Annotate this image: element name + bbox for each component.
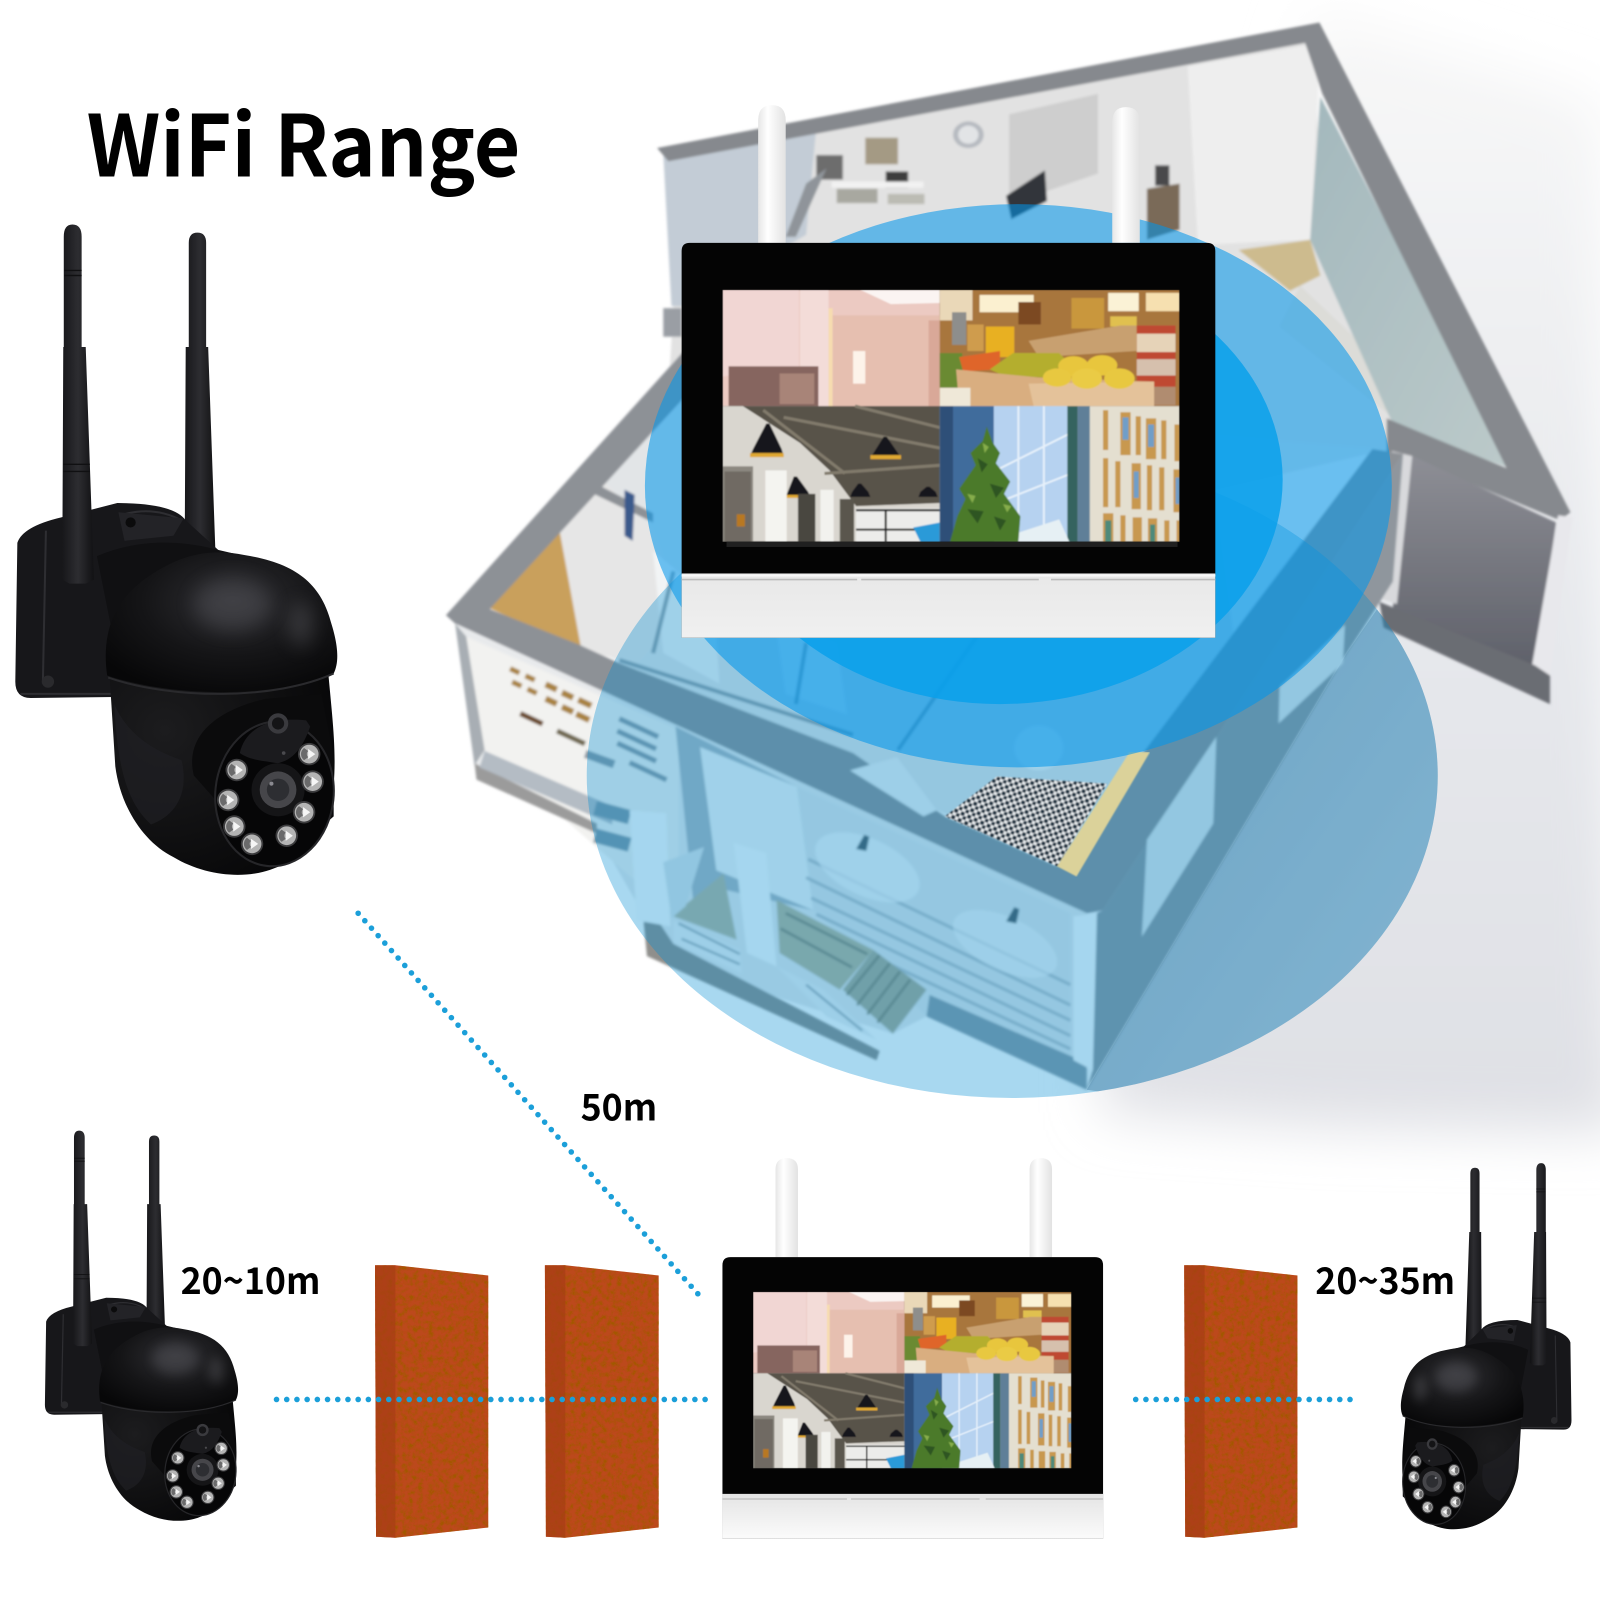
right dotted line	[1136, 1397, 1352, 1402]
diagonal dotted line	[358, 913, 698, 1294]
right side wall	[1310, 97, 1514, 469]
shelf decorations	[816, 138, 924, 204]
right small camera	[1399, 1163, 1571, 1529]
camera feeds	[753, 1292, 1071, 1468]
wall behind door	[676, 727, 813, 910]
porch floor	[673, 873, 737, 940]
wifi coverage circle: inner	[717, 255, 1283, 704]
interior wall panels	[653, 454, 1367, 770]
brick wall 3	[1184, 1265, 1297, 1538]
antennas	[776, 1158, 1052, 1257]
front interior floor	[580, 393, 1372, 866]
front facade	[455, 623, 1087, 1090]
top rim	[657, 22, 1570, 515]
camera feeds	[722, 290, 1180, 542]
wood strip	[1057, 752, 1150, 877]
porch foundation	[643, 913, 880, 1060]
monitor bezel	[722, 1257, 1103, 1539]
lamps	[856, 835, 869, 851]
left small camera	[45, 1131, 240, 1521]
roof rim front part	[446, 349, 1403, 913]
wifi coverage circle: lower	[587, 453, 1438, 1098]
base bar	[682, 573, 1215, 638]
post	[1073, 913, 1097, 1070]
title: WiFi Range	[87, 80, 520, 202]
columns and railing	[630, 810, 670, 927]
wall windows dots	[509, 666, 593, 746]
bed	[1280, 286, 1397, 418]
label: 50m: 50m	[581, 1077, 657, 1131]
monitor bezel	[682, 243, 1215, 638]
wifi coverage circle: upper	[645, 204, 1392, 767]
left dotted line	[277, 1397, 707, 1402]
label: 20~10m: 20~10m	[181, 1251, 320, 1305]
door	[700, 747, 813, 910]
outer dark panel	[1393, 454, 1556, 671]
brick wall 2	[545, 1265, 659, 1538]
small monitor	[722, 1158, 1103, 1539]
brick wall 1	[375, 1265, 488, 1538]
right wall	[1087, 454, 1403, 1090]
house cutaway illustration	[446, 22, 1572, 1090]
label: 20~35m: 20~35m	[1315, 1251, 1455, 1305]
bathroom tile floor	[945, 752, 1150, 877]
floor shadow behind house	[1102, 10, 1600, 1133]
back room walls	[653, 41, 1408, 755]
striped wall	[797, 787, 1070, 1058]
ground shade inside lower circle	[1087, 610, 1438, 1092]
large camera	[15, 224, 341, 875]
antennas	[758, 105, 1140, 243]
large monitor	[682, 105, 1215, 638]
base bar	[722, 1494, 1103, 1539]
